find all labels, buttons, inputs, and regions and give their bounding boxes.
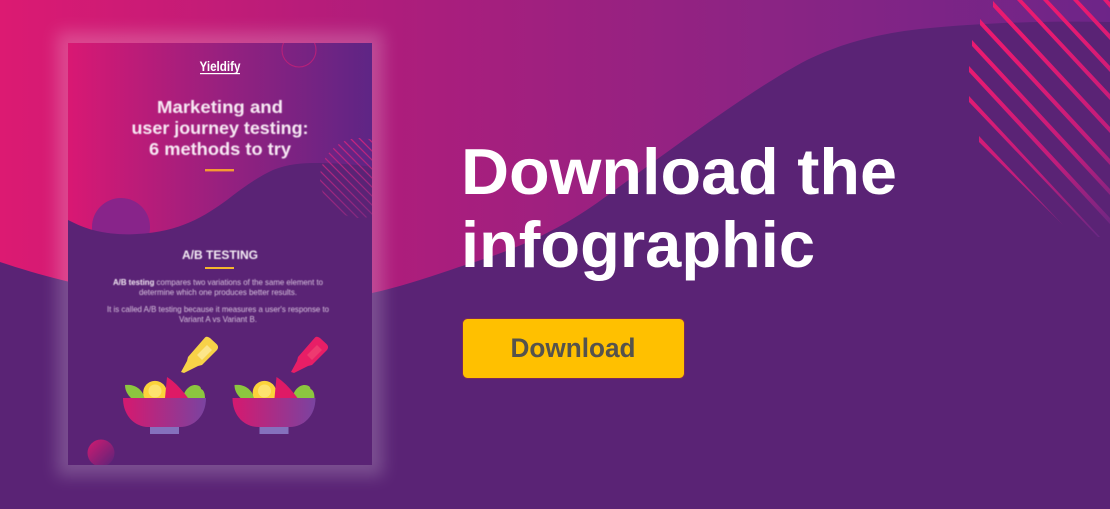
preview body text: It is called A/B testing because it measures a user's response to <box>107 304 329 314</box>
preview title: Marketing and <box>157 97 283 117</box>
icon: yellow sauce bottle <box>181 337 218 373</box>
icon: salad bowl A <box>123 377 206 434</box>
background magenta wave <box>0 0 1110 302</box>
preview title <box>132 97 308 159</box>
preview body text: determine which one produces better results. <box>139 287 297 297</box>
preview outline circle <box>282 43 316 68</box>
preview wave <box>68 163 372 465</box>
main heading <box>461 136 897 281</box>
decorative stripes top right <box>969 0 1110 237</box>
download button <box>462 318 684 378</box>
preview circle upper <box>92 198 150 234</box>
preview body text <box>107 277 329 324</box>
preview background <box>68 43 372 233</box>
preview bottom circle <box>88 440 114 466</box>
preview title: user journey testing: <box>132 118 308 138</box>
preview logo: Yieldify <box>200 59 241 74</box>
preview body text: Variant A vs Variant B. <box>179 314 257 324</box>
icon: salad bowl B <box>232 377 316 434</box>
icon: red sauce bottle <box>291 337 328 373</box>
main heading: Download the <box>461 136 897 208</box>
preview title: 6 methods to try <box>149 139 291 159</box>
download button: Download <box>510 333 636 363</box>
preview section heading: A/B TESTING <box>182 248 258 262</box>
preview striped circle <box>320 138 372 218</box>
infographic preview panel <box>68 43 372 465</box>
preview body text: A/B testing compares two variations of the same element to <box>113 277 323 287</box>
preview title underline <box>205 169 234 171</box>
preview heading underline <box>205 267 234 269</box>
glow behind infographic preview <box>57 32 383 476</box>
main heading: infographic <box>461 209 815 281</box>
